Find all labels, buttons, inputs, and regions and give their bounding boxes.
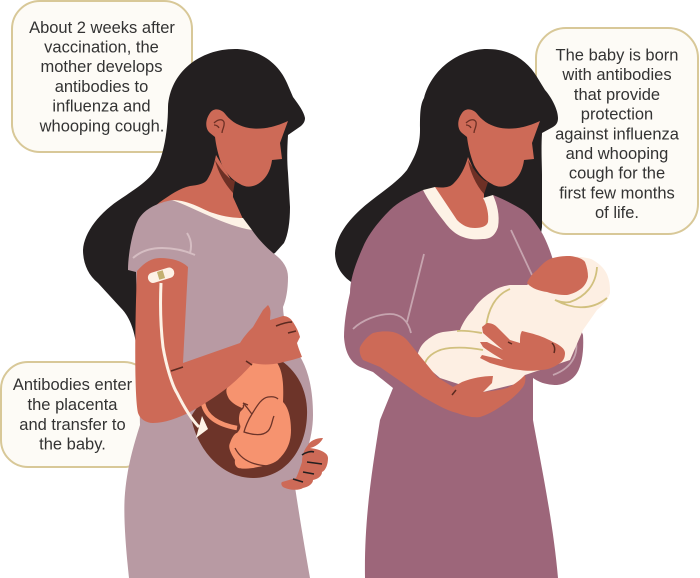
collar — [423, 187, 499, 239]
neck and chest — [150, 155, 246, 226]
callout: baby born with antibodies: that provide — [574, 86, 660, 104]
callout: mother develops antibodies: vaccination, the — [44, 38, 159, 56]
wrap folds — [425, 267, 607, 363]
lower arm and hand — [360, 331, 525, 417]
callout: baby born with antibodies: The baby is born — [556, 46, 678, 64]
lower hand — [281, 438, 328, 490]
collar — [172, 200, 252, 230]
neck shadow — [468, 160, 488, 194]
dress — [344, 190, 583, 578]
arm and hand — [135, 258, 302, 423]
callout: antibodies enter placenta: the placenta — [28, 396, 118, 414]
womb — [191, 358, 307, 478]
callout: mother develops antibodies — [12, 1, 192, 152]
figure: mother holding baby — [335, 49, 610, 578]
face — [206, 109, 288, 187]
callout: antibodies enter placenta: Antibodies enter — [13, 376, 133, 394]
callout: baby born with antibodies: against influenza — [555, 126, 680, 144]
callout: antibodies enter placenta: and transfer to — [19, 416, 126, 434]
face — [458, 109, 540, 187]
callout: mother develops antibodies: mother develops — [40, 58, 162, 76]
figure: pregnant woman — [83, 49, 328, 578]
umbilical cord — [203, 403, 237, 428]
callout: baby born with antibodies: with antibodies — [561, 66, 672, 84]
callout: mother develops antibodies: About 2 weeks after — [29, 19, 175, 37]
bandage — [147, 266, 176, 284]
creases — [452, 342, 555, 395]
callout: antibodies enter placenta: the baby. — [39, 436, 106, 454]
sleeve seams — [353, 230, 576, 375]
upper hand — [480, 323, 565, 371]
fetus outlines — [235, 397, 278, 466]
ear detail — [214, 120, 224, 133]
sleeve seams — [133, 233, 195, 258]
baby head — [527, 256, 588, 295]
ear detail — [466, 120, 476, 133]
callout: baby born with antibodies: protection — [581, 106, 653, 124]
fetus — [226, 360, 291, 469]
neck shadow — [215, 160, 235, 193]
callout: baby born with antibodies: and whooping — [566, 145, 668, 163]
callout: baby born with antibodies: cough for the — [569, 164, 665, 182]
callout: mother develops antibodies: antibodies to — [55, 78, 148, 96]
hair — [335, 49, 558, 285]
callout: baby born with antibodies — [536, 28, 698, 234]
neck — [430, 157, 492, 240]
callout: baby born with antibodies: first few months — [559, 184, 675, 202]
hair — [83, 49, 305, 343]
arm and finger creases — [171, 322, 296, 371]
baby wrap — [418, 256, 610, 392]
callout: mother develops antibodies: influenza and — [52, 98, 151, 116]
callout: mother develops antibodies: whooping cough. — [39, 118, 164, 136]
dress — [124, 200, 313, 578]
callout: antibodies enter placenta — [1, 362, 151, 467]
arrow: antibodies path — [161, 283, 208, 438]
callout: baby born with antibodies: of life. — [595, 204, 639, 222]
